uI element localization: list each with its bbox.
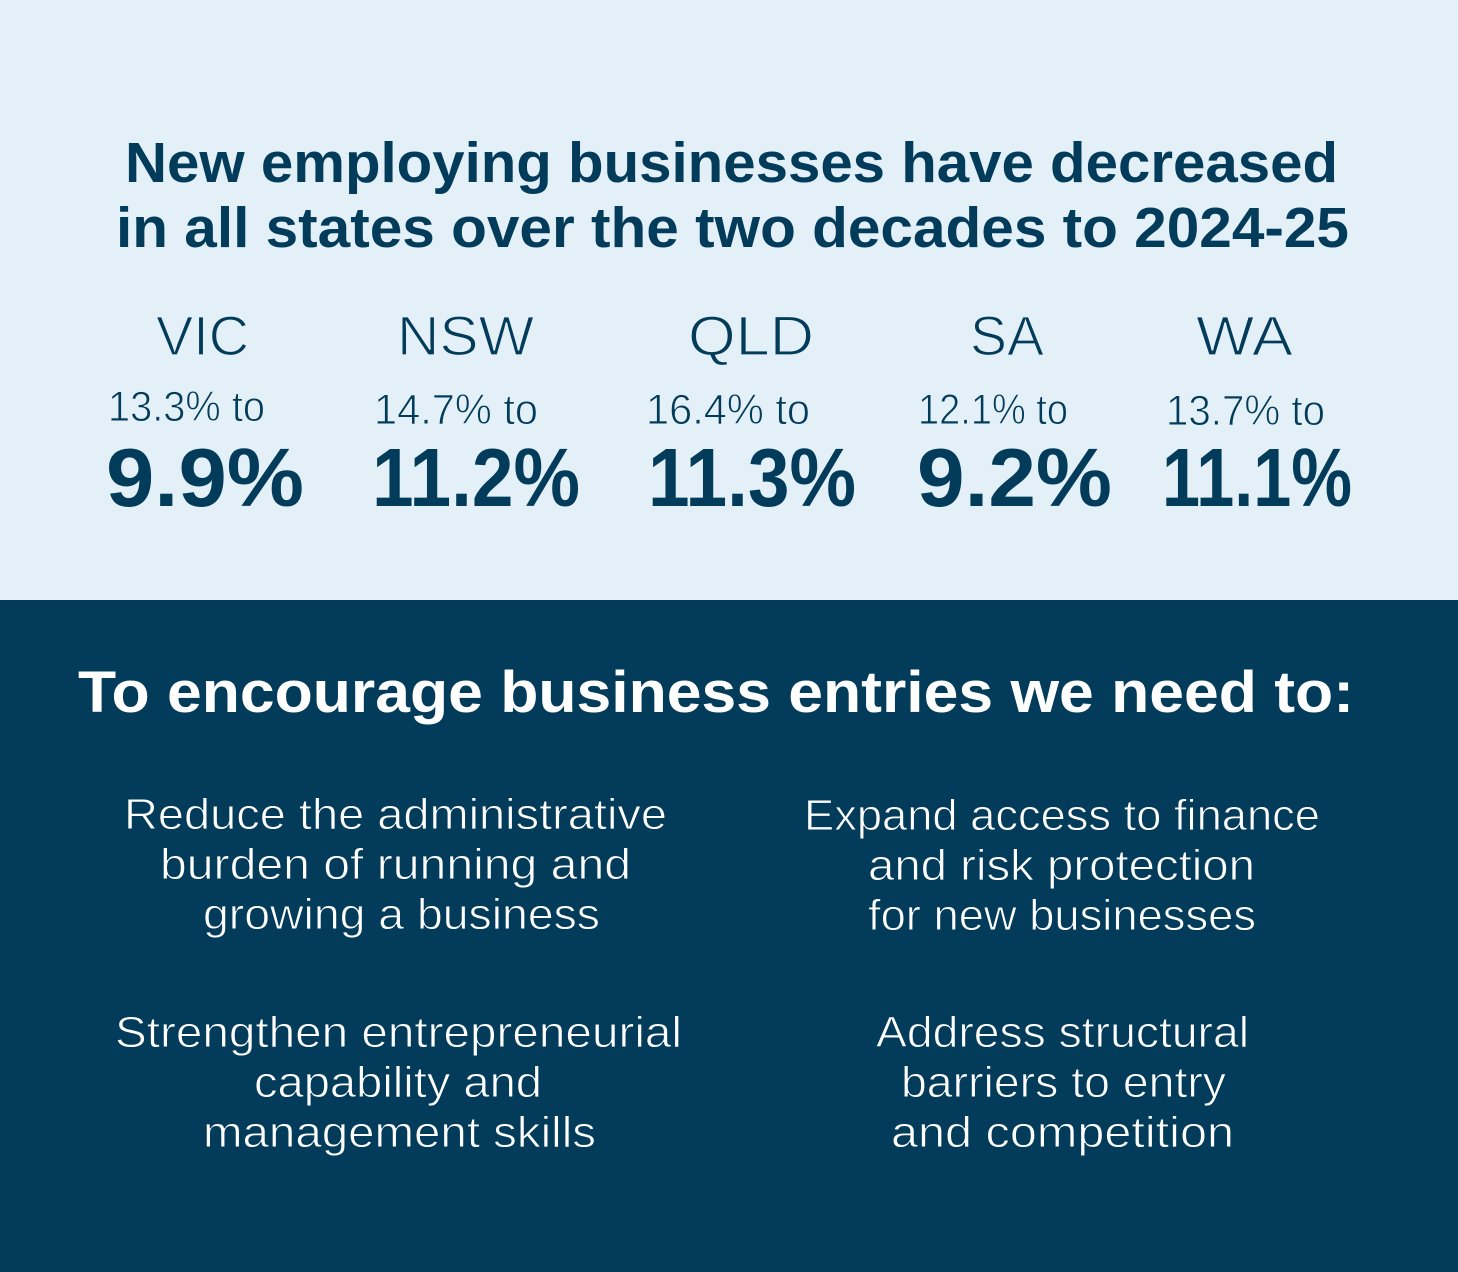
stat: VIC [106,304,304,524]
stat: NSW: 11.2% [372,431,580,524]
action: address structural barriers: Address structural [876,1008,1249,1057]
stat: NSW [372,304,580,524]
action: reduce administrative burden: Reduce the administrative [124,790,667,839]
stat: SA [917,304,1112,524]
action: strengthen capability: management skills [203,1108,596,1157]
stat: QLD [646,304,856,524]
action: address structural barriers: and competition [891,1108,1234,1157]
panel: state statistics background [0,0,1458,600]
stat: VIC: 9.9% [106,431,304,524]
stat: NSW: NSW [397,304,534,367]
action: expand access to finance: and risk protection [868,841,1255,890]
action: reduce administrative burden [124,790,667,939]
stat: WA: 13.7% to [1166,387,1325,435]
action: address structural barriers [876,1008,1249,1157]
action: strengthen capability: Strengthen entrepreneurial [115,1008,682,1057]
title [116,131,1349,260]
stat: WA: WA [1196,304,1294,367]
stat: QLD: QLD [688,304,814,367]
stat: QLD: 16.4% to [646,386,810,434]
action: expand access to finance [804,791,1320,940]
stat: WA: 11.1% [1162,431,1352,524]
action: strengthen capability [115,1008,682,1157]
action: reduce administrative burden: burden of running and [160,840,631,889]
heading: actions: To encourage business entries we need to: [78,660,1354,725]
action: expand access to finance: for new businesses [868,891,1256,940]
action: reduce administrative burden: growing a business [203,890,600,939]
stat: SA: SA [970,304,1045,367]
stat: QLD: 11.3% [648,431,856,524]
title: in all states over the two decades to 2024-25 [116,196,1349,260]
stat: WA [1162,304,1352,524]
stat: VIC: 13.3% to [108,383,265,431]
action: strengthen capability: capability and [254,1058,542,1107]
action: address structural barriers: barriers to entry [901,1058,1226,1107]
stat: VIC: VIC [156,304,249,367]
action: expand access to finance: Expand access to finance [804,791,1320,840]
stat: NSW: 14.7% to [374,386,538,434]
panel: actions background [0,600,1458,1272]
stat: SA: 9.2% [917,431,1112,524]
stat: SA: 12.1% to [918,386,1068,434]
title: New employing businesses have decreased [125,131,1338,195]
